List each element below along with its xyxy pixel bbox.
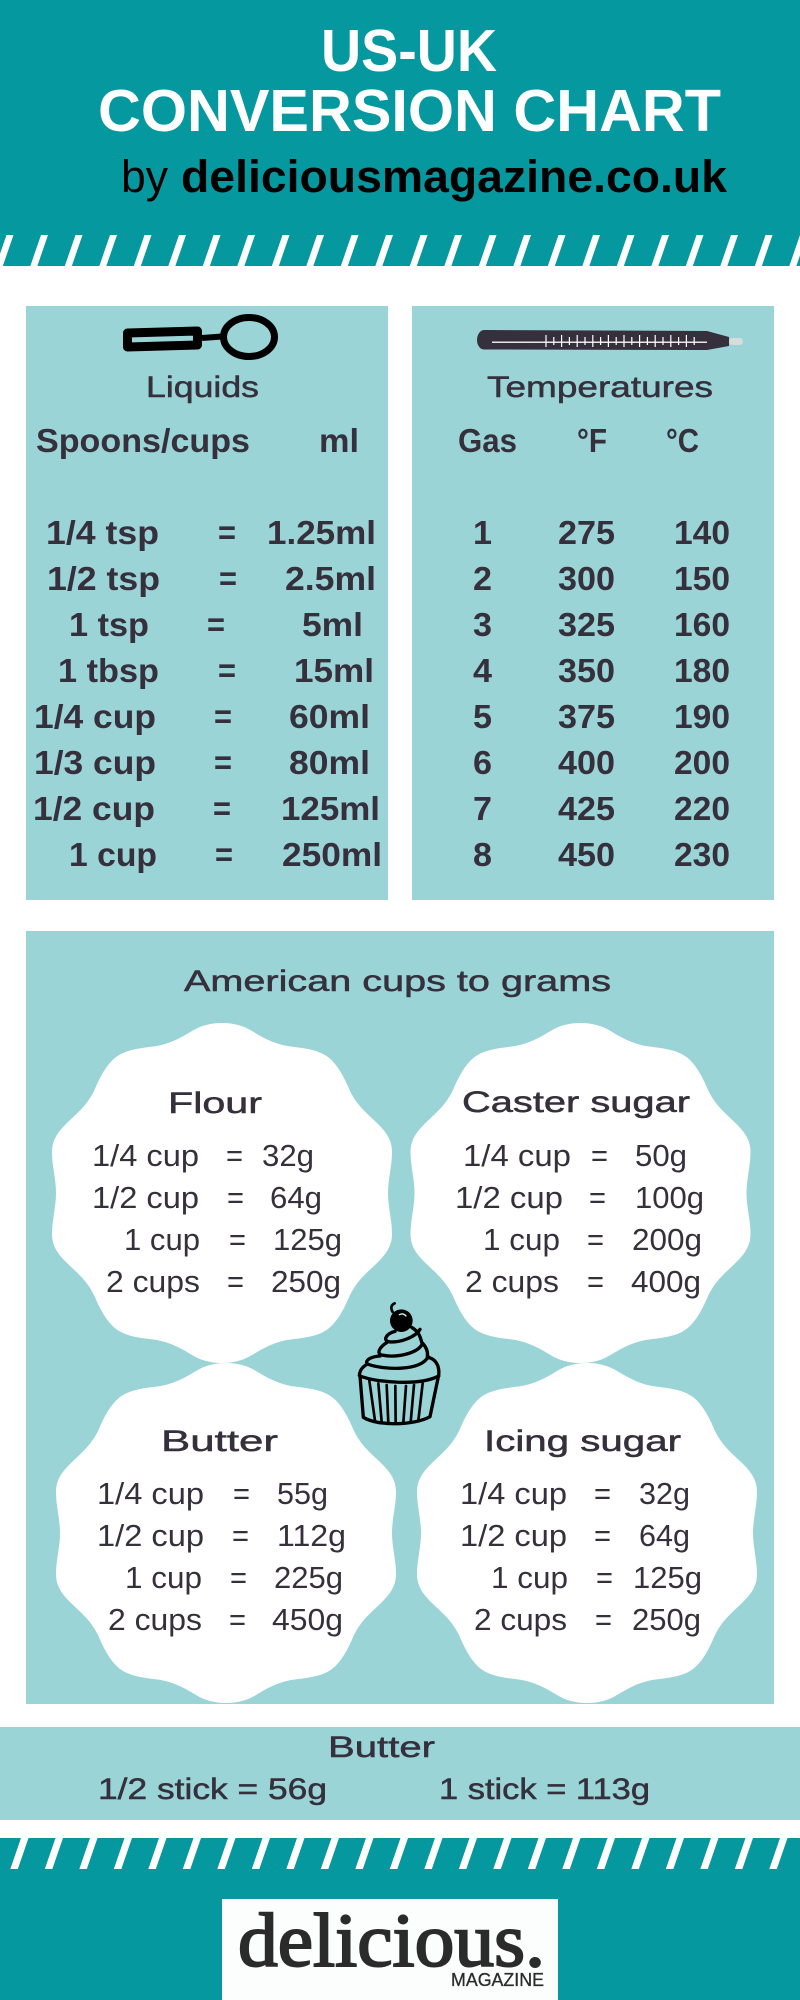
butter heading: Butter	[161, 1425, 278, 1458]
icon: spoon	[128, 318, 274, 356]
temperature rows: 200	[674, 744, 730, 781]
footer banner	[0, 1838, 800, 2000]
temperature rows: 375	[558, 698, 615, 735]
logo: delicious magazine: delicious.	[238, 1899, 545, 1983]
butter rows: 112g	[277, 1518, 346, 1553]
butter rows: =	[229, 1602, 246, 1637]
liquids rows: =	[207, 606, 225, 643]
liquids rows: =	[219, 560, 237, 597]
flour heading: Flour	[168, 1087, 262, 1120]
liquids rows: 1 tbsp	[58, 652, 159, 689]
liquids rows: 60ml	[289, 698, 370, 735]
butter rows: 450g	[272, 1602, 343, 1637]
temperature rows: 180	[674, 652, 730, 689]
butter rows: =	[233, 1476, 250, 1511]
caster sugar rows: 200g	[632, 1222, 702, 1257]
icing sugar rows: 1/2 cup	[460, 1518, 567, 1553]
caster sugar rows: =	[589, 1180, 606, 1215]
butter rows: =	[232, 1518, 249, 1553]
liquids rows: 2.5ml	[285, 560, 376, 597]
butter rows	[97, 1476, 346, 1637]
flour rows: 1/4 cup	[92, 1138, 199, 1173]
footer stripes	[0, 1838, 800, 1869]
scallop card: icing sugar	[417, 1363, 757, 1703]
liquids rows: 5ml	[302, 606, 363, 643]
caster sugar rows: 1/4 cup	[463, 1138, 571, 1173]
title	[98, 18, 721, 144]
temperature rows: 2	[473, 560, 492, 597]
butter rows: =	[230, 1560, 247, 1595]
liquids rows: 1/4 cup	[34, 698, 156, 735]
liquids rows: 1/3 cup	[34, 744, 156, 781]
icing sugar rows: 125g	[633, 1560, 702, 1595]
heading: american cups to grams: American cups to grams	[184, 965, 611, 998]
liquids rows: 1/2 cup	[33, 790, 155, 827]
heading: temperatures: Temperatures	[487, 371, 713, 404]
panel: american cups to grams	[26, 931, 774, 1704]
scallop card: flour	[52, 1023, 392, 1363]
temperature rows: 425	[558, 790, 615, 827]
flour rows: 32g	[262, 1138, 314, 1173]
flour rows: 1 cup	[124, 1222, 200, 1257]
icing sugar rows: 32g	[639, 1476, 690, 1511]
liquids rows: 1 tsp	[69, 606, 149, 643]
temperature rows: 300	[558, 560, 615, 597]
temperature rows: 150	[674, 560, 730, 597]
temperature rows: 350	[558, 652, 615, 689]
temperature rows: 325	[558, 606, 615, 643]
icing sugar rows	[460, 1476, 702, 1637]
column headers: gas, F, C: °C	[666, 422, 699, 459]
liquids rows: =	[215, 836, 233, 873]
temperature rows: 5	[473, 698, 492, 735]
flour rows: =	[226, 1138, 243, 1173]
temperature rows: 190	[674, 698, 730, 735]
butter rows: 1 cup	[125, 1560, 202, 1595]
caster sugar rows: 1 cup	[483, 1222, 560, 1257]
temperature rows: 450	[558, 836, 615, 873]
caster sugar rows	[455, 1138, 704, 1299]
flour rows: 250g	[271, 1264, 341, 1299]
liquids rows: 15ml	[294, 652, 374, 689]
column headers: spoons and ml	[36, 422, 359, 459]
temperature rows: 3	[473, 606, 492, 643]
liquids rows: 80ml	[289, 744, 370, 781]
column headers: gas, F, C: °F	[577, 422, 607, 459]
header stripes	[0, 235, 800, 266]
logo: delicious magazine: MAGAZINE	[451, 1970, 544, 1990]
icing sugar heading: Icing sugar	[484, 1425, 681, 1458]
liquids rows: 250ml	[282, 836, 382, 873]
temperature rows: 230	[674, 836, 730, 873]
liquids rows: 1/4 tsp	[46, 514, 159, 551]
caster sugar heading: Caster sugar	[462, 1086, 690, 1119]
temperature rows: 7	[473, 790, 492, 827]
icing sugar rows: =	[594, 1476, 611, 1511]
flour rows: 2 cups	[106, 1264, 200, 1299]
temperature rows: 8	[473, 836, 492, 873]
caster sugar rows: =	[587, 1264, 604, 1299]
scallop card: caster sugar	[410, 1023, 750, 1363]
butter rows: 1/2 cup	[97, 1518, 204, 1553]
panel: butter sticks	[0, 1727, 800, 1820]
one stick value: 1 stick = 113g	[439, 1773, 650, 1806]
liquids rows: 1/2 tsp	[47, 560, 160, 597]
icing sugar rows: 1/4 cup	[460, 1476, 567, 1511]
icing sugar rows: 1 cup	[491, 1560, 568, 1595]
heading: liquids: Liquids	[146, 371, 259, 404]
liquids rows: =	[218, 514, 236, 551]
column headers: gas, F, C: Gas	[458, 422, 517, 459]
butter rows: 1/4 cup	[97, 1476, 204, 1511]
liquids rows: 1.25ml	[267, 514, 376, 551]
butter rows: 2 cups	[108, 1602, 202, 1637]
butter rows: 225g	[274, 1560, 343, 1595]
temperature rows: 4	[473, 652, 493, 689]
flour rows: =	[227, 1180, 244, 1215]
caster sugar rows: 50g	[635, 1138, 687, 1173]
temperature rows: 160	[674, 606, 730, 643]
icon: thermometer	[477, 330, 743, 350]
temperature rows: 1	[473, 514, 492, 551]
temperature rows: 220	[674, 790, 730, 827]
column headers: spoons and ml: ml	[319, 422, 359, 459]
temperature rows	[473, 514, 730, 873]
icing sugar rows: =	[594, 1518, 611, 1553]
temperature rows: 400	[558, 744, 615, 781]
flour rows: 1/2 cup	[92, 1180, 199, 1215]
temperature rows: 6	[473, 744, 492, 781]
scallop card: butter	[56, 1363, 396, 1703]
butter sticks heading: Butter	[328, 1731, 435, 1764]
icon: cupcake	[359, 1303, 439, 1424]
liquids rows	[33, 514, 382, 873]
liquids rows: =	[213, 790, 231, 827]
caster sugar rows: =	[591, 1138, 608, 1173]
title: CONVERSION CHART	[98, 78, 721, 144]
caster sugar rows: 2 cups	[465, 1264, 559, 1299]
header banner	[0, 0, 800, 266]
liquids rows: =	[214, 698, 232, 735]
title: US-UK	[321, 18, 497, 84]
icing sugar rows: =	[596, 1560, 613, 1595]
column headers: spoons and ml: Spoons/cups	[36, 422, 250, 459]
panel: temperatures	[412, 306, 774, 900]
temperature rows: 140	[674, 514, 730, 551]
byline: by	[121, 151, 168, 202]
liquids rows: =	[218, 652, 236, 689]
panel: liquids	[26, 306, 388, 900]
flour rows	[92, 1138, 342, 1299]
liquids rows: 125ml	[281, 790, 380, 827]
flour rows: 64g	[270, 1180, 322, 1215]
byline: deliciousmagazine.co.uk	[181, 151, 728, 202]
icing sugar rows: 250g	[632, 1602, 701, 1637]
icing sugar rows: =	[595, 1602, 612, 1637]
caster sugar rows: =	[587, 1222, 604, 1257]
icing sugar rows: 64g	[639, 1518, 690, 1553]
flour rows: =	[227, 1264, 244, 1299]
liquids rows: =	[214, 744, 232, 781]
half stick value: 1/2 stick = 56g	[98, 1773, 327, 1806]
icing sugar rows: 2 cups	[474, 1602, 567, 1637]
caster sugar rows: 1/2 cup	[455, 1180, 563, 1215]
flour rows: 125g	[273, 1222, 342, 1257]
flour rows: =	[229, 1222, 246, 1257]
caster sugar rows: 100g	[635, 1180, 704, 1215]
temperature rows: 275	[558, 514, 615, 551]
butter rows: 55g	[277, 1476, 328, 1511]
column headers: gas, F, C	[458, 422, 699, 459]
caster sugar rows: 400g	[631, 1264, 701, 1299]
liquids rows: 1 cup	[69, 836, 157, 873]
